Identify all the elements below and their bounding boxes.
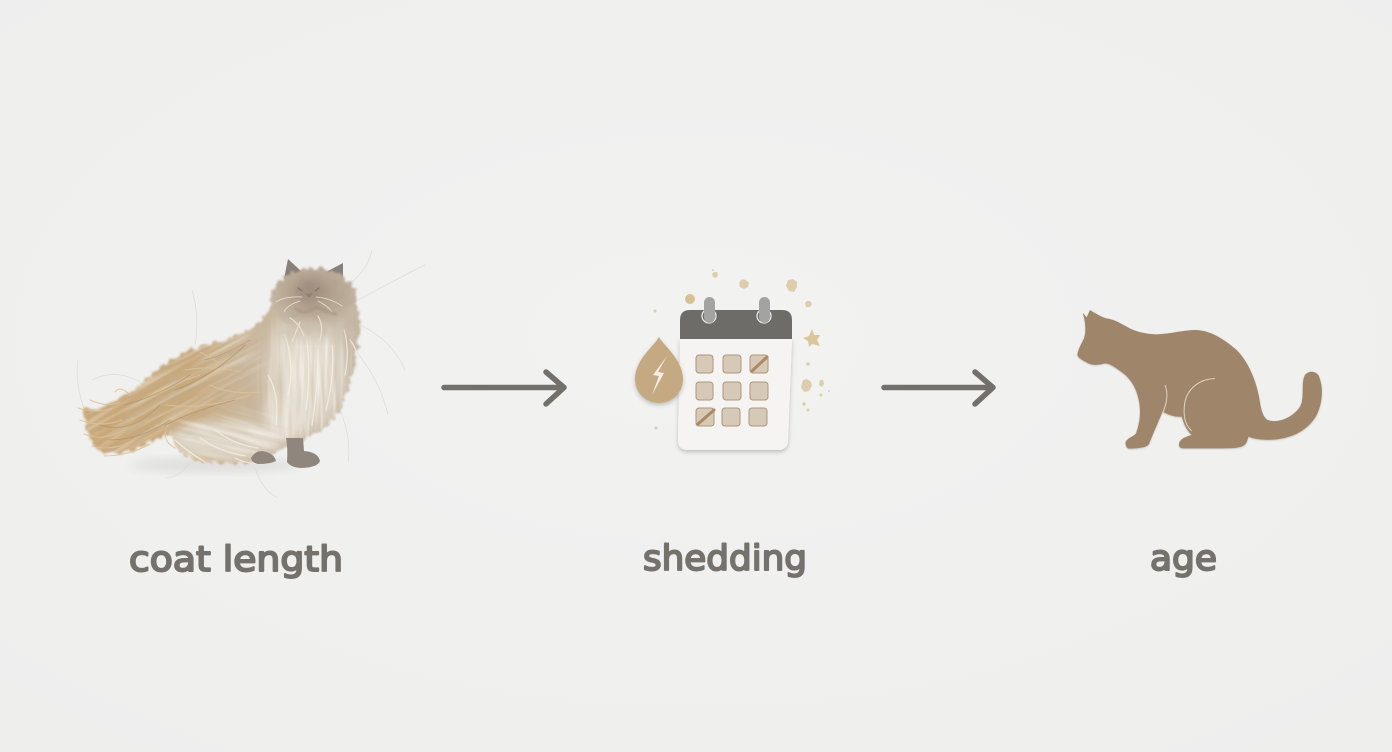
date cells (696, 355, 768, 426)
cell slashes (698, 357, 767, 424)
calendar card (678, 339, 792, 450)
pale chest (268, 314, 344, 430)
arrow: shedding to age (884, 372, 993, 404)
chin blend into chest (276, 322, 348, 340)
fur shading and streak texture (84, 318, 352, 463)
label: age: age (1150, 539, 1217, 579)
sparkles (654, 269, 830, 430)
fur body (84, 280, 359, 463)
face details (276, 280, 342, 342)
tail streaks (84, 333, 261, 453)
stray whiskers and hairs (77, 250, 425, 498)
ears (284, 259, 343, 284)
haunch lines (1162, 379, 1215, 431)
chest streaks (268, 326, 352, 438)
binding rings (702, 297, 771, 323)
legs (251, 438, 320, 468)
calendar header (680, 310, 792, 339)
icon: cat silhouette (1077, 310, 1322, 449)
label: coat length: coat length (129, 540, 343, 580)
haunch streaks (175, 407, 282, 462)
fur strands (78, 330, 358, 463)
label: shedding: shedding (643, 539, 807, 579)
head (271, 268, 357, 332)
icon: long-haired cat (76, 250, 425, 498)
pale hindquarter (170, 420, 282, 460)
water drop with bolt (635, 337, 683, 403)
arrow: coat length to shedding (444, 372, 564, 404)
icon: calendar with drop (635, 269, 830, 450)
